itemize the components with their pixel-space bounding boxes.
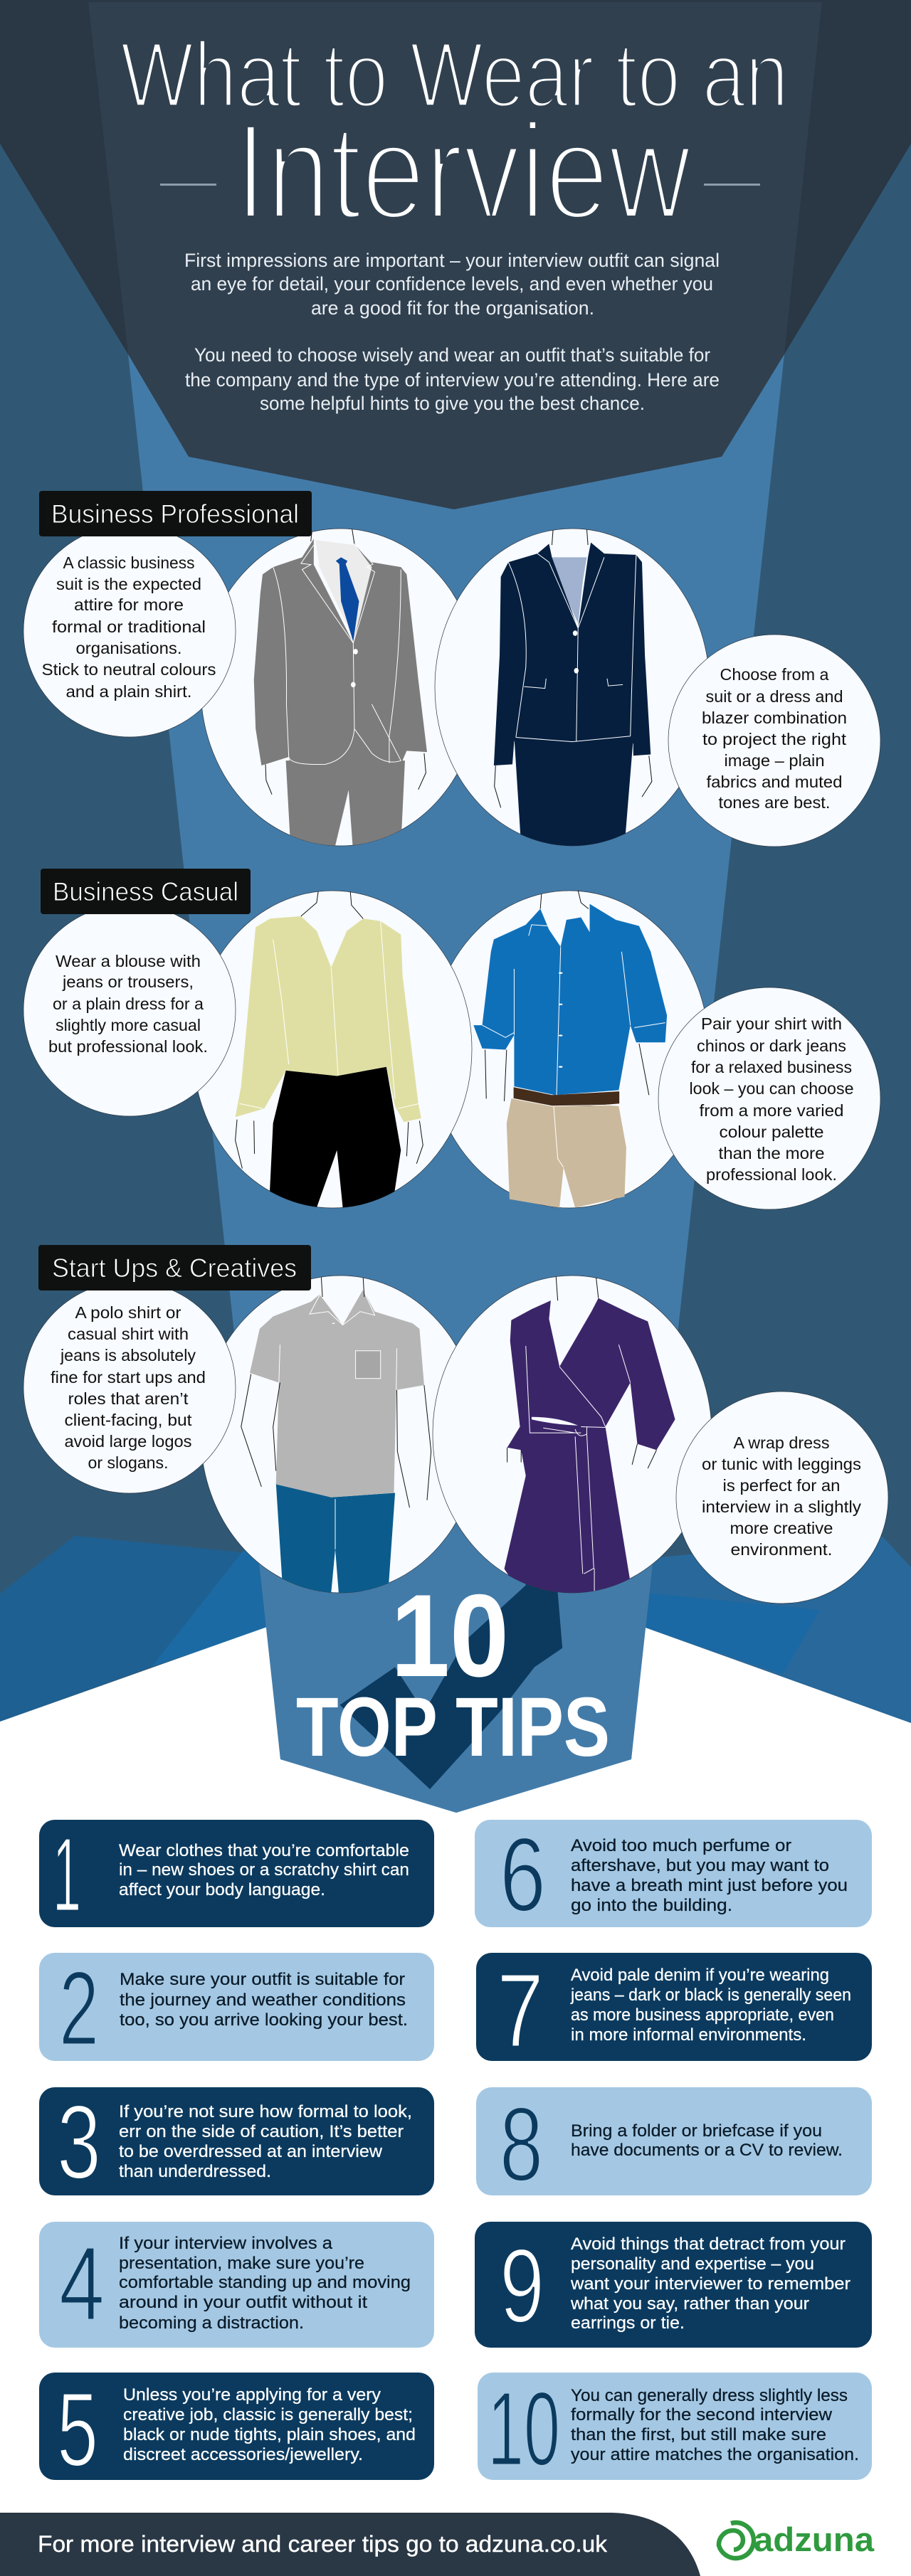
tip 1: 1 <box>53 1816 81 1934</box>
bubble: start ups right: more creative <box>730 1519 833 1537</box>
bubble: business professional left: A classic business <box>63 553 195 572</box>
bubble: business professional left: formal or traditional <box>52 618 206 636</box>
tip 7: 7 <box>497 1952 544 2069</box>
tip 1: Wear clothes that you’re comfortable <box>119 1841 409 1860</box>
tip 9 <box>475 2222 872 2348</box>
tip 3: err on the side of caution, It’s better <box>119 2122 404 2141</box>
heading: 10 top tips: 10 <box>391 1570 509 1701</box>
tip 5: black or nude tights, plain shoes, and <box>123 2425 416 2444</box>
circle: mens suit background <box>201 529 480 846</box>
tip 5 <box>39 2371 434 2488</box>
tip 2: the journey and weather conditions <box>120 1991 406 2010</box>
tip 10: your attire matches the organisation. <box>571 2445 859 2464</box>
heading: 10 top tips: TOP TIPS <box>296 1680 610 1774</box>
bubble: business casual right: for a relaxed business <box>691 1058 852 1076</box>
bubble: business professional left: organisations. <box>75 639 182 657</box>
bubble: business casual right: look – you can choose <box>689 1079 854 1098</box>
tip 4: 4 <box>59 2225 105 2343</box>
tip 3 <box>39 2084 434 2201</box>
bubble: business professional right: fabrics and muted <box>706 773 843 791</box>
bubble: start ups left: A polo shirt or <box>75 1303 181 1322</box>
section: start ups and creatives <box>23 1245 888 1604</box>
heading: start ups and creatives: Start Ups & Creatives <box>52 1253 297 1283</box>
tip 8: 8 <box>500 2086 543 2203</box>
heading: business casual: Business Casual <box>53 877 238 906</box>
bubble: business professional right <box>668 635 880 847</box>
tip 2: 2 <box>59 1950 99 2067</box>
tip 9: want your interviewer to remember <box>570 2274 851 2294</box>
illustration: purple wrap dress <box>505 1276 675 1593</box>
heading: business professional <box>39 491 312 536</box>
heading: 10 top tips <box>296 1570 610 1774</box>
footer bar: For more interview and career tips go to adzuna.co.uk <box>38 2531 608 2557</box>
tip 4: presentation, make sure you’re <box>119 2254 364 2273</box>
circle: womens casual background <box>193 891 472 1208</box>
bubble: business casual right: chinos or dark jeans <box>697 1037 846 1055</box>
bubble: business professional left: and a plain shirt. <box>65 682 192 701</box>
tip 8 <box>476 2086 872 2203</box>
bubble: business professional left: suit is the expected <box>56 575 201 593</box>
tip 9: 9 <box>500 2227 544 2345</box>
intro text: the company and the type of interview you’re attending. Here are <box>185 369 720 391</box>
heading: start ups and creatives <box>38 1245 311 1290</box>
section: business casual <box>23 869 880 1209</box>
tip 8: have documents or a CV to review. <box>571 2141 843 2160</box>
intro text: an eye for detail, your confidence levels, and even whether you <box>191 273 713 295</box>
illustration: navy suit <box>494 529 652 846</box>
tip 5: creative job, classic is generally best; <box>123 2405 413 2424</box>
tip 4: becoming a distraction. <box>119 2313 304 2333</box>
bubble: start ups left: casual shirt with <box>68 1325 189 1343</box>
tip 9: what you say, rather than your <box>570 2294 809 2313</box>
tip 4 <box>39 2222 434 2348</box>
bubble: business professional right: to project the right <box>702 730 847 748</box>
tip 7 <box>476 1952 872 2069</box>
bubble: start ups left <box>23 1281 236 1493</box>
tip 6: Avoid too much perfume or <box>571 1836 791 1855</box>
tip 3: than underdressed. <box>119 2162 271 2181</box>
bubble: start ups right: is perfect for an <box>723 1476 840 1495</box>
bubble: business casual right: Pair your shirt with <box>701 1014 842 1033</box>
circle: polo background <box>201 1276 480 1593</box>
tip 2 <box>39 1950 434 2067</box>
bubble: business casual left: Wear a blouse with <box>56 952 201 970</box>
bubble: start ups left: client-facing, but <box>64 1411 192 1429</box>
section: business professional <box>23 491 880 847</box>
heading: business casual <box>41 869 251 914</box>
tip 7: Avoid pale denim if you’re wearing <box>571 1966 829 1985</box>
bubble: business professional right: suit or a dress and <box>706 687 843 706</box>
bubble: business professional right: Choose from a <box>720 665 829 684</box>
bubble: start ups left: or slogans. <box>88 1453 168 1472</box>
tip 9: personality and expertise – you <box>571 2254 814 2274</box>
title: Interview <box>235 95 692 248</box>
tip 10: 10 <box>488 2370 560 2488</box>
tip 3: to be overdressed at an interview <box>119 2142 383 2161</box>
bubble: business casual right: professional look. <box>706 1165 837 1184</box>
tip 9: earrings or tie. <box>571 2313 685 2333</box>
intro text <box>184 250 720 414</box>
tip 5: discreet accessories/jewellery. <box>123 2445 363 2464</box>
bubble: start ups right: environment. <box>730 1540 833 1559</box>
tip 4: around in your outfit without it <box>119 2293 367 2312</box>
tip 6: have a breath mint just before you <box>571 1876 848 1895</box>
tip 3: 3 <box>57 2084 101 2201</box>
tip 10: than the first, but still make sure <box>571 2425 826 2444</box>
bubble: business casual left: slightly more casual <box>56 1016 201 1034</box>
top tips panel with check mark <box>261 1558 651 1813</box>
tip 5: Unless you’re applying for a very <box>123 2385 381 2405</box>
bubble: business casual right: from a more varied <box>699 1101 844 1120</box>
tip 6: 6 <box>500 1816 546 1934</box>
bubble: business casual left: but professional look. <box>48 1037 208 1056</box>
tip 8: Bring a folder or briefcase if you <box>571 2121 822 2141</box>
tip 1: affect your body language. <box>119 1880 325 1899</box>
intro text: some helpful hints to give you the best chance. <box>260 393 645 414</box>
circle: mens casual background <box>430 891 709 1208</box>
tip 7: in more informal environments. <box>571 2025 806 2045</box>
tip 4: If your interview involves a <box>119 2234 333 2253</box>
illustration: blue shirt and chinos <box>473 891 667 1208</box>
title: What to Wear to an <box>120 22 789 127</box>
tip 2: Make sure your outfit is suitable for <box>120 1970 405 1989</box>
tip 10: formally for the second interview <box>571 2405 833 2424</box>
bubble: start ups right <box>676 1392 888 1604</box>
tip 3: If you’re not sure how formal to look, <box>119 2102 412 2121</box>
bubble: business casual right <box>658 987 880 1209</box>
illustration: polo shirt and jeans <box>241 1277 431 1593</box>
intro text: First impressions are important – your interview outfit can signal <box>184 250 720 271</box>
bubble: start ups left: jeans is absolutely <box>60 1346 196 1364</box>
tip 6: go into the building. <box>571 1896 732 1915</box>
header panel <box>88 2 822 509</box>
tip 10: You can generally dress slightly less <box>571 2386 848 2405</box>
tip 6 <box>475 1816 872 1934</box>
bubble: start ups left: fine for start ups and <box>51 1368 206 1387</box>
tip 2: too, so you arrive looking your best. <box>120 2010 408 2030</box>
footer bar <box>0 2513 700 2576</box>
circle: wrap dress background <box>433 1276 712 1593</box>
tip 7: jeans – dark or black is generally seen <box>570 1986 851 2005</box>
tip 5: 5 <box>57 2371 98 2488</box>
bubble: start ups right: interview in a slightly <box>702 1498 862 1516</box>
bubble: start ups right: or tunic with leggings <box>702 1455 861 1473</box>
bubble: business professional left: attire for more <box>74 595 184 614</box>
tip 1: in – new shoes or a scratchy shirt can <box>119 1860 409 1880</box>
tip 7: as more business appropriate, even <box>571 2005 834 2025</box>
bubble: start ups right: A wrap dress <box>733 1433 830 1452</box>
bubble: business professional right: blazer combination <box>702 709 847 727</box>
bubble: business casual left <box>23 904 236 1116</box>
bubble: start ups left: roles that aren’t <box>68 1389 189 1408</box>
title <box>120 22 789 248</box>
illustration: grey suit <box>254 529 427 846</box>
tip 1 <box>39 1816 434 1934</box>
bubble: start ups left: avoid large logos <box>64 1432 192 1451</box>
bubble: business professional left <box>23 525 236 737</box>
intro text: are a good fit for the organisation. <box>311 297 594 319</box>
bubble: business professional left: Stick to neutral colours <box>41 660 216 679</box>
bubble: business casual left: jeans or trousers, <box>62 972 194 991</box>
bubble: business casual right: than the more <box>719 1144 824 1162</box>
heading: business professional: Business Professional <box>51 499 299 529</box>
circle: womens suit background <box>435 529 710 846</box>
intro text: You need to choose wisely and wear an outfit that’s suitable for <box>194 344 710 366</box>
tip 9: Avoid things that detract from your <box>571 2235 846 2254</box>
illustration: yellow blouse and black trousers <box>236 891 423 1208</box>
bubble: business professional right: tones are best. <box>719 793 830 812</box>
bubble: business casual left: or a plain dress for a <box>53 995 204 1013</box>
bubble: business casual right: colour palette <box>719 1123 824 1141</box>
tip 6: aftershave, but you may want to <box>571 1856 829 1875</box>
tip 4: comfortable standing up and moving <box>119 2273 411 2292</box>
tip 10 <box>478 2370 872 2488</box>
logo: adzuna: adzuna <box>754 2521 875 2558</box>
bubble: business professional right: image – plain <box>725 751 824 770</box>
